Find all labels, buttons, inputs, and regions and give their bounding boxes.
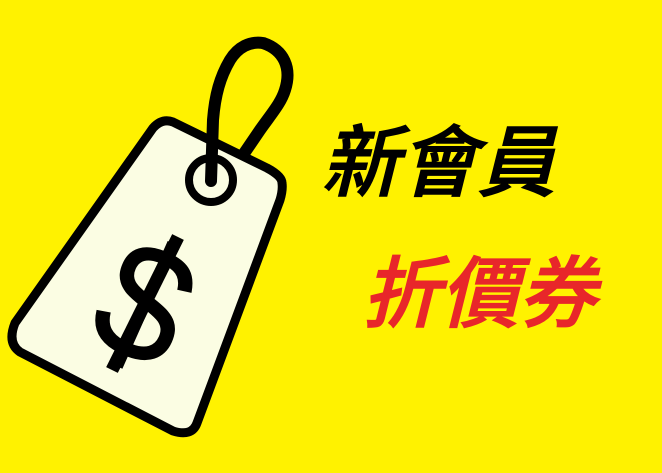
dollar sign: $ bbox=[69, 201, 221, 405]
tag body bbox=[12, 121, 282, 433]
tag string back strand bbox=[243, 43, 287, 155]
heading: 新會員: 新會員 bbox=[317, 119, 573, 207]
heading: 折價券: 折價券 bbox=[358, 250, 614, 338]
tag string front strand bbox=[211, 43, 263, 181]
tag eyelet bbox=[189, 158, 233, 202]
